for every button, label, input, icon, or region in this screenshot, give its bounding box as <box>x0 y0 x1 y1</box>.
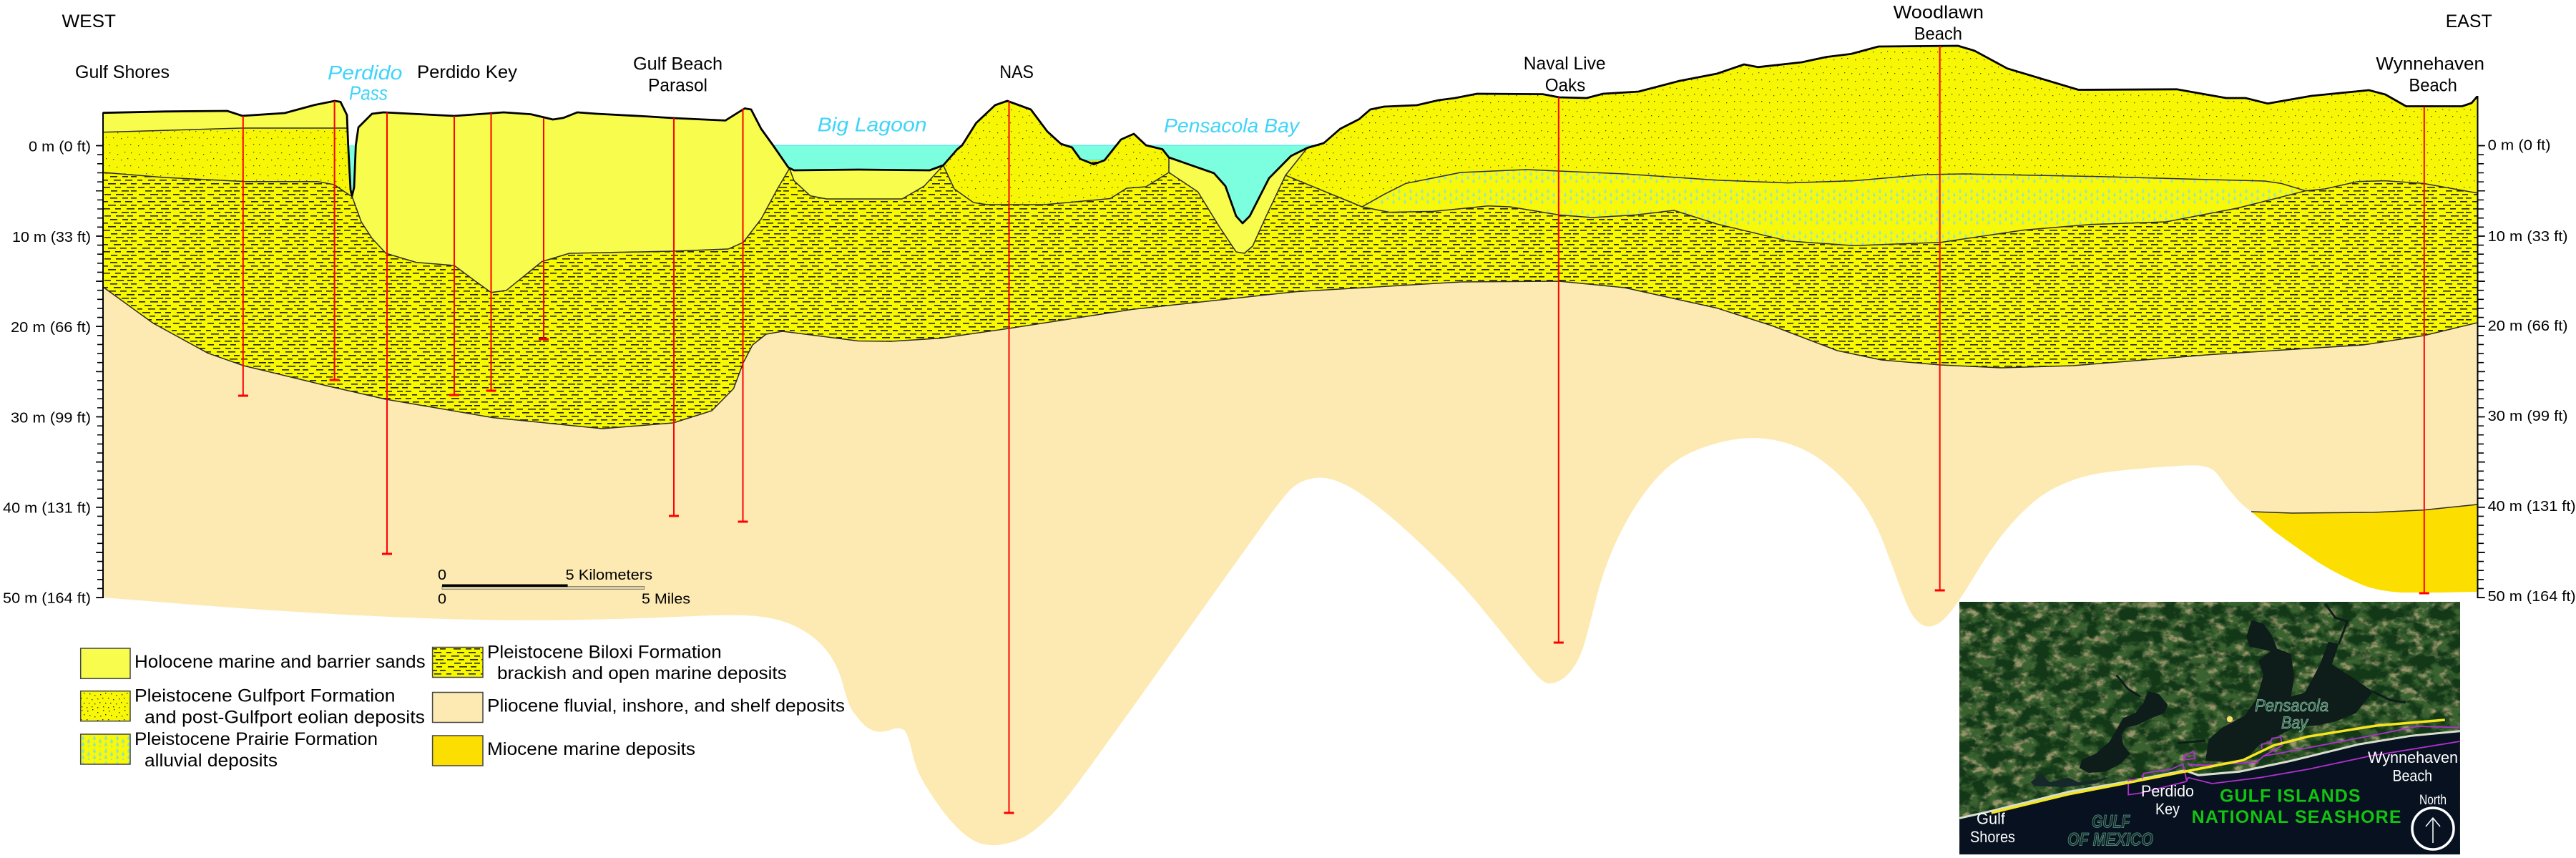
place labels: Naval Live <box>1524 54 1606 74</box>
map: place names: OF MEXICO <box>2067 830 2153 850</box>
right axis labels: 50 m (164 ft) <box>2488 589 2576 605</box>
place labels: Woodlawn <box>1894 3 1984 23</box>
right axis labels: 30 m (99 ft) <box>2488 409 2568 424</box>
legend item: Prairie Formation: Pleistocene Prairie Formation <box>134 729 378 749</box>
right axis labels <box>2488 137 2576 605</box>
water: Big Lagoon and Pensacola Bay <box>773 145 1316 223</box>
legend item: Biloxi Formation: brackish and open marine deposits <box>497 663 787 683</box>
water body labels: Big Lagoon <box>818 114 927 136</box>
map: Pensacola city marker <box>2226 716 2233 723</box>
left elevation axis <box>99 112 103 598</box>
scale bar <box>438 567 690 608</box>
layer: Pleistocene Gulfport Formation, east <box>1285 46 2477 245</box>
left axis labels: 50 m (164 ft) <box>3 591 91 607</box>
legend item: Gulfport Formation <box>81 686 425 728</box>
scale bar: 0 <box>438 592 446 608</box>
legend item: Holocene: Holocene marine and barrier sands <box>134 652 426 672</box>
scale bar: 5 Kilometers <box>565 567 652 583</box>
legend item: Biloxi Formation <box>433 642 787 683</box>
place labels: Beach <box>1914 24 1962 44</box>
map: place names: Bay <box>2281 713 2309 733</box>
map: park name: GULF ISLANDS <box>2220 786 2361 806</box>
core boreholes (red lines) <box>238 46 2429 813</box>
left axis labels <box>3 140 91 607</box>
legend item: Prairie Formation: alluvial deposits <box>145 751 278 771</box>
place labels: Gulf Shores <box>75 62 170 82</box>
layer: Holocene sands at Perdido Key <box>352 109 790 293</box>
map: land <box>1959 602 2460 854</box>
layer: Gulfport Formation at Gulf Shores <box>103 128 351 196</box>
map: place names <box>1970 696 2458 850</box>
left axis labels: 10 m (33 ft) <box>12 230 91 245</box>
legend <box>81 642 845 771</box>
legend item: Prairie Formation <box>81 729 378 771</box>
heading: EAST: EAST <box>2446 11 2492 31</box>
place labels: Parasol <box>648 75 707 95</box>
ground surface profile <box>103 46 2477 223</box>
right elevation axis <box>2478 96 2482 598</box>
layer: Pleistocene Biloxi Formation <box>103 157 2477 429</box>
left axis labels: 20 m (66 ft) <box>11 320 91 336</box>
layer: Holocene sands under Big Lagoon <box>790 165 944 199</box>
legend item: Holocene <box>81 648 426 678</box>
place labels: Gulf Beach <box>633 54 723 74</box>
map: place names: Gulf <box>1977 810 2006 828</box>
locator satellite map <box>1959 602 2460 854</box>
water: Perdido Pass <box>348 145 356 196</box>
layer: Pliocene fluvial, inshore and shelf deposits <box>103 281 2477 845</box>
water body labels: Perdido <box>328 62 402 84</box>
place labels: Oaks <box>1545 75 1585 95</box>
map: water bodies and coast <box>1959 603 2460 854</box>
icon: north arrow: North <box>2419 793 2447 808</box>
legend item: Pliocene: Pliocene fluvial, inshore, and shelf deposits <box>487 696 845 716</box>
place labels <box>75 3 2484 95</box>
layer: Holocene sands under Pensacola Bay <box>1169 148 1308 253</box>
map: park name <box>2192 786 2401 827</box>
map: place names: Shores <box>1970 828 2015 846</box>
layer: Gulfport Formation under NAS <box>944 101 1169 205</box>
map: place names: Perdido <box>2141 782 2194 800</box>
water body labels <box>328 62 1301 137</box>
map: park boundary (purple) <box>2128 726 2460 795</box>
place labels: Perdido Key <box>417 62 518 82</box>
place labels: Beach <box>2409 75 2457 95</box>
legend item: Biloxi Formation: Pleistocene Biloxi Formation <box>487 642 722 662</box>
layer: Pleistocene Prairie Formation <box>1362 170 2306 245</box>
left axis labels: 0 m (0 ft) <box>29 140 91 155</box>
map: place names: Beach <box>2392 767 2432 785</box>
right axis labels: 0 m (0 ft) <box>2488 137 2551 153</box>
map: park name: NATIONAL SEASHORE <box>2192 807 2401 827</box>
layer: Miocene marine deposits <box>2251 504 2477 593</box>
layer: Holocene sands at Gulf Shores <box>103 101 347 132</box>
left axis labels: 30 m (99 ft) <box>11 411 91 426</box>
scale bar: 0 <box>438 567 446 583</box>
map: place names: Pensacola <box>2255 696 2328 716</box>
heading: WEST: WEST <box>62 11 116 31</box>
formation boundary lines <box>103 128 2477 513</box>
map: cross-section line (yellow) <box>1992 720 2445 813</box>
legend item: Gulfport Formation: Pleistocene Gulfport Formation <box>134 686 395 706</box>
place labels: Wynnehaven <box>2376 54 2484 74</box>
map: place names: Key <box>2155 800 2180 818</box>
water body labels: Pensacola Bay <box>1164 114 1301 137</box>
right axis labels: 20 m (66 ft) <box>2488 318 2568 334</box>
map: place names: Wynnehaven <box>2368 749 2458 766</box>
right axis labels: 40 m (131 ft) <box>2488 499 2576 515</box>
map: place names: GULF <box>2092 812 2130 832</box>
icon: north arrow <box>2412 793 2454 849</box>
legend item: Miocene: Miocene marine deposits <box>487 739 695 759</box>
right axis labels: 10 m (33 ft) <box>2488 229 2568 245</box>
scale bar: 5 Miles <box>642 592 690 608</box>
legend item: Miocene <box>433 736 695 766</box>
water body labels: Pass <box>349 82 388 104</box>
legend item: Pliocene <box>433 693 845 723</box>
legend item: Gulfport Formation: and post-Gulfport eolian deposits <box>145 708 425 728</box>
place labels: NAS <box>999 62 1034 82</box>
left axis labels: 40 m (131 ft) <box>3 501 91 517</box>
